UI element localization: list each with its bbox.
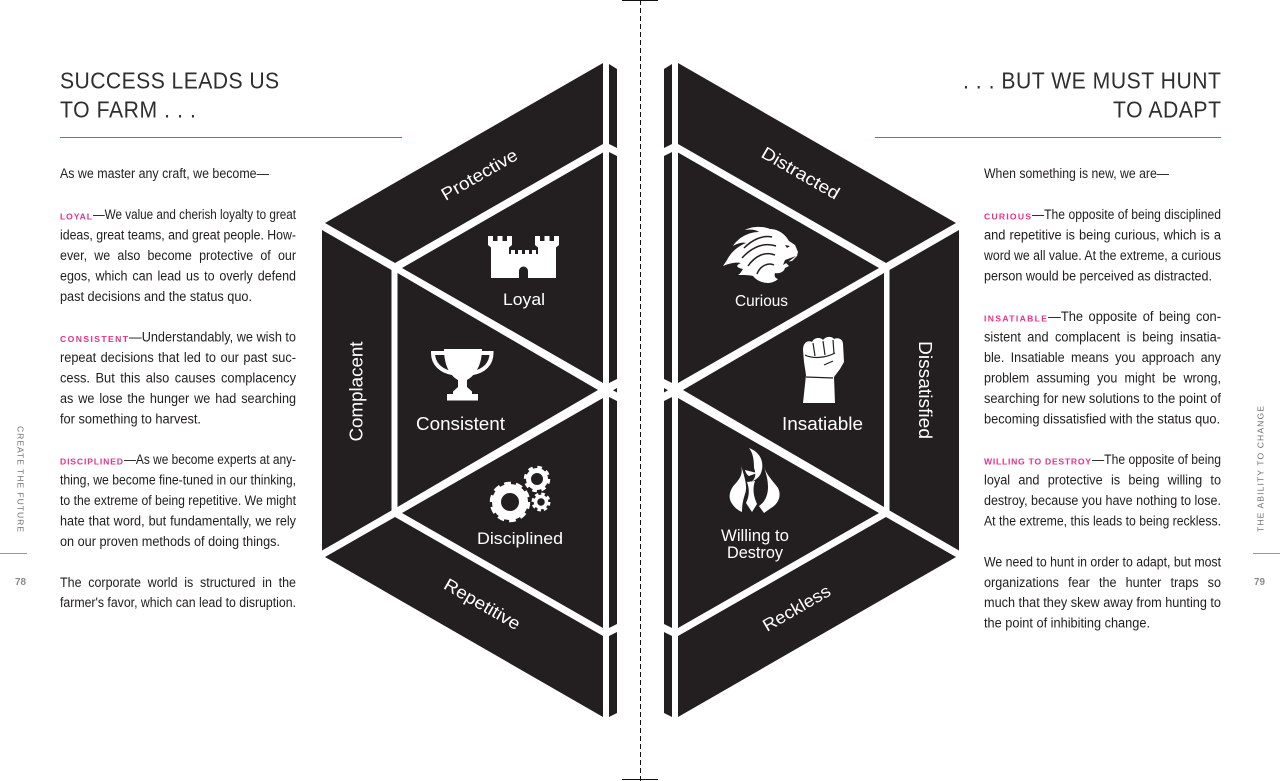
text block: loyal: egos, which can lead us to overly defend xyxy=(60,268,296,283)
segment: repetitive xyxy=(325,517,603,717)
text block: closing: organizations fear the hunter traps so xyxy=(984,575,1221,590)
text block: insatiable: sistent and complacent is being insatia- xyxy=(984,330,1221,345)
text block: insatiable: searching for new solutions to the point of xyxy=(984,391,1221,406)
center fold line xyxy=(622,0,658,781)
panel: left page heading: TO FARM . . . xyxy=(60,96,196,123)
label: willing to destroy: Destroy xyxy=(727,544,784,562)
text block: curious: word we all value. At the extreme, a curious xyxy=(983,248,1221,263)
left folio and running title: CREATE THE FUTURE xyxy=(16,426,26,532)
right folio and running title: 79 xyxy=(1254,577,1265,588)
segment: consistent: Consistent xyxy=(416,414,505,434)
text block: disciplined: hate that word, but fundamentally, we rely xyxy=(60,514,296,528)
text block: consistent: repeat decisions that led to our past suc- xyxy=(60,350,296,365)
icon: trophy xyxy=(433,349,492,400)
text block: loyal: LOYAL xyxy=(60,212,92,222)
text block: closing xyxy=(60,575,296,610)
text block: curious: and repetitive is being curious, which is a xyxy=(984,228,1222,242)
text block: curious xyxy=(983,207,1222,283)
left folio and running title xyxy=(0,426,27,588)
label: willing to destroy: Willing to xyxy=(721,527,789,545)
panel: right page heading xyxy=(875,67,1221,138)
text block: insatiable: —The opposite of being con- xyxy=(1048,309,1221,324)
segment: complacent: Complacent xyxy=(346,342,366,442)
text block: willing to destroy: At the extreme, this leads to being reckless. xyxy=(984,514,1221,528)
fold strips xyxy=(664,64,672,717)
text block: consistent: as we lose the hunger we had searching xyxy=(60,391,296,406)
text block: insatiable: INSATIABLE xyxy=(984,314,1047,324)
text block: curious: —The opposite of being disciplined xyxy=(1032,207,1221,222)
text block: insatiable: problem assuming you might be wrong, xyxy=(984,370,1221,386)
panel: right page body text xyxy=(983,166,1222,631)
text block: disciplined: DISCIPLINED xyxy=(60,457,123,467)
text block: insatiable xyxy=(984,309,1221,426)
text block: consistent xyxy=(60,330,296,426)
text block: disciplined: thing, we become fine-tuned in our thinking, xyxy=(60,473,296,488)
text block: willing to destroy: destroy, because you have nothing to lose. xyxy=(984,493,1221,508)
segment: disciplined: Disciplined xyxy=(477,529,563,548)
text block: loyal xyxy=(60,207,297,304)
segment: willing to destroy xyxy=(678,398,879,628)
segment: insatiable xyxy=(683,273,884,507)
segment: loyal: Loyal xyxy=(503,291,545,309)
segment: consistent xyxy=(398,273,598,507)
text block: closing: We need to hunt in order to adapt, but most xyxy=(984,554,1221,569)
segment: distracted: Distracted xyxy=(758,143,843,203)
segment: loyal xyxy=(402,152,603,383)
panel: left page heading xyxy=(60,67,402,138)
fold strips xyxy=(609,64,617,717)
panel: left page body text xyxy=(60,166,297,610)
text block: willing to destroy: —The opposite of being xyxy=(1092,452,1221,467)
icon: lion xyxy=(723,227,798,283)
right folio and running title: THE ABILITY TO CHANGE xyxy=(1256,406,1266,532)
text block: loyal: ever, we also become protective of our xyxy=(60,248,297,263)
text block: closing: farmer's favor, which can lead to disruption. xyxy=(60,595,296,610)
text block: willing to destroy: loyal and protective is being willing to xyxy=(984,473,1221,488)
text block: disciplined: to the extreme of being repetitive. We might xyxy=(60,493,296,508)
segment: insatiable: Insatiable xyxy=(782,414,863,434)
text block: insatiable: becoming dissatisfied with the status quo. xyxy=(984,411,1220,426)
text block: disciplined: on our proven methods of doing things. xyxy=(60,534,280,549)
text block: willing to destroy: WILLING TO DESTROY xyxy=(984,457,1091,467)
text block: loyal: past decisions and the status quo. xyxy=(60,289,252,304)
right folio and running title xyxy=(1253,406,1280,588)
segment: reckless xyxy=(678,517,956,717)
text block: curious: CURIOUS xyxy=(984,212,1031,222)
panel: left page heading: SUCCESS LEADS US xyxy=(60,67,279,94)
text block: disciplined: —As we become experts at any- xyxy=(124,452,296,467)
text block: consistent: cess. But this also causes complacency xyxy=(60,370,296,386)
text block: insatiable: ble. Insatiable means you approach any xyxy=(984,350,1221,365)
segment: complacent xyxy=(322,230,392,550)
segment: dissatisfied xyxy=(890,230,959,550)
panel: farmer hexagon xyxy=(322,63,959,717)
segment: curious xyxy=(678,152,879,383)
panel: right page heading: TO ADAPT xyxy=(1113,96,1221,123)
text block: closing: The corporate world is structured in the xyxy=(60,575,296,590)
segment: distracted xyxy=(678,63,956,263)
icon: fist xyxy=(803,337,844,403)
icon: castle xyxy=(488,236,559,278)
text block: loyal: —We value and cherish loyalty to great xyxy=(93,207,296,222)
text block: closing: much that they skew away from hunting to xyxy=(984,595,1221,610)
segment: protective: Protective xyxy=(438,145,521,204)
segment: repetitive: Repetitive xyxy=(440,574,524,634)
panel: right page body text: When something is new, we are— xyxy=(984,166,1170,181)
segment: protective xyxy=(325,63,603,263)
segment: reckless: Reckless xyxy=(759,581,834,635)
text block: loyal: ideas, great teams, and great people. How- xyxy=(60,228,296,242)
text block: closing xyxy=(984,554,1221,631)
text block: consistent: CONSISTENT xyxy=(60,334,129,344)
panel: left page body text: As we master any craft, we become— xyxy=(60,166,270,181)
text block: willing to destroy xyxy=(984,452,1221,528)
text block: curious: person would be perceived as distracted. xyxy=(984,268,1212,283)
icon: flame xyxy=(730,448,780,513)
left folio and running title: 78 xyxy=(15,577,26,588)
text block: consistent: —Understandably, we wish to xyxy=(129,330,296,345)
segment: dissatisfied: Dissatisfied xyxy=(915,341,935,439)
label: willing to destroy xyxy=(721,527,789,562)
text block: disciplined xyxy=(60,452,296,549)
icon: gears xyxy=(492,468,549,520)
panel: right page heading: . . . BUT WE MUST HUNT xyxy=(963,67,1221,94)
text block: consistent: for something to harvest. xyxy=(60,411,201,426)
segment: disciplined xyxy=(402,398,603,628)
text block: closing: the point of inhibiting change. xyxy=(984,616,1150,631)
segment: curious: Curious xyxy=(735,293,788,310)
